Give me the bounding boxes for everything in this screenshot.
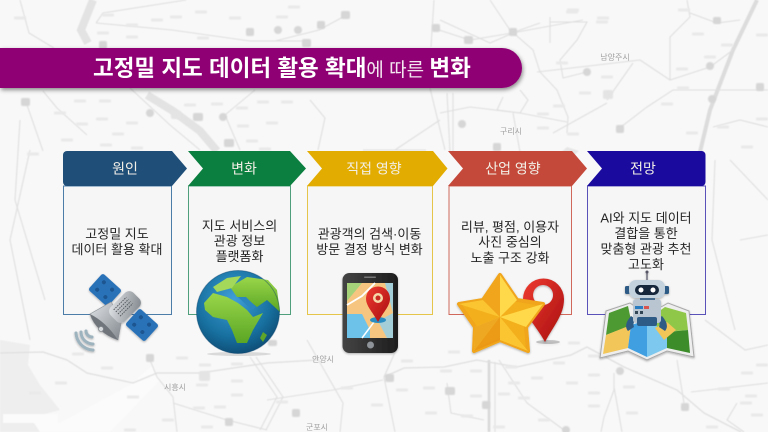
body text: 원인: 고정밀 지도 — [85, 226, 149, 242]
title text: 고정밀 지도 데이터 활용 확대에 따른 변화 — [93, 56, 471, 81]
map place names: 시흥시 — [164, 382, 186, 392]
panel: 산업 영향 — [448, 151, 587, 314]
map place names: 남양주시 — [600, 53, 630, 62]
header: 변화 — [188, 151, 306, 186]
header: 전망: 전망 — [630, 160, 656, 176]
map place names — [164, 53, 630, 432]
body text: 변화: 지도 서비스의 — [202, 218, 277, 234]
header: 산업 영향: 산업 영향 — [485, 160, 541, 176]
header: 변화: 변화 — [231, 160, 257, 176]
header: 전망 — [587, 151, 706, 186]
map place names: 구리시 — [500, 127, 522, 136]
body text: 산업 영향: 사진 중심의 — [478, 234, 542, 250]
icon: satellite — [76, 273, 159, 350]
header: 원인: 원인 — [112, 160, 138, 176]
body text: 전망: AI와 지도 데이터 — [600, 210, 692, 226]
body text: 직접 영향: 관광객의 검색·이동 — [318, 226, 421, 242]
body text: 변화: 관광 정보 — [214, 234, 265, 248]
header: 직접 영향: 직접 영향 — [346, 160, 402, 176]
panel: 직접 영향 — [307, 151, 448, 314]
icon: globe — [196, 270, 280, 356]
map place names: 안양시 — [312, 354, 334, 364]
icon: gold star with red pin — [459, 275, 564, 351]
body text: 직접 영향: 방문 결정 방식 변화 — [316, 242, 423, 257]
panel: 전망 — [587, 151, 706, 314]
panel: 원인 — [63, 151, 187, 314]
map place names: 군포시 — [306, 423, 328, 432]
body text: 변화: 플랫폼화 — [216, 249, 263, 264]
body text: 전망: 맞춤형 관광 추천 — [601, 241, 691, 256]
panel: 변화 — [188, 151, 306, 314]
body text: 전망: 고도화 — [628, 257, 664, 272]
icon: robot on folded map — [600, 270, 694, 360]
header: 산업 영향 — [448, 151, 587, 186]
header: 직접 영향 — [307, 151, 448, 186]
title banner — [0, 48, 522, 88]
body text: 전망: 결합을 통한 — [614, 226, 678, 241]
body text: 산업 영향: 노출 구조 강화 — [471, 250, 550, 266]
icon: smartphone with map pin — [342, 273, 398, 353]
header: 원인 — [63, 151, 187, 186]
body text: 원인: 데이터 활용 확대 — [72, 242, 162, 257]
body text: 산업 영향: 리뷰, 평점, 이용자 — [461, 220, 559, 234]
